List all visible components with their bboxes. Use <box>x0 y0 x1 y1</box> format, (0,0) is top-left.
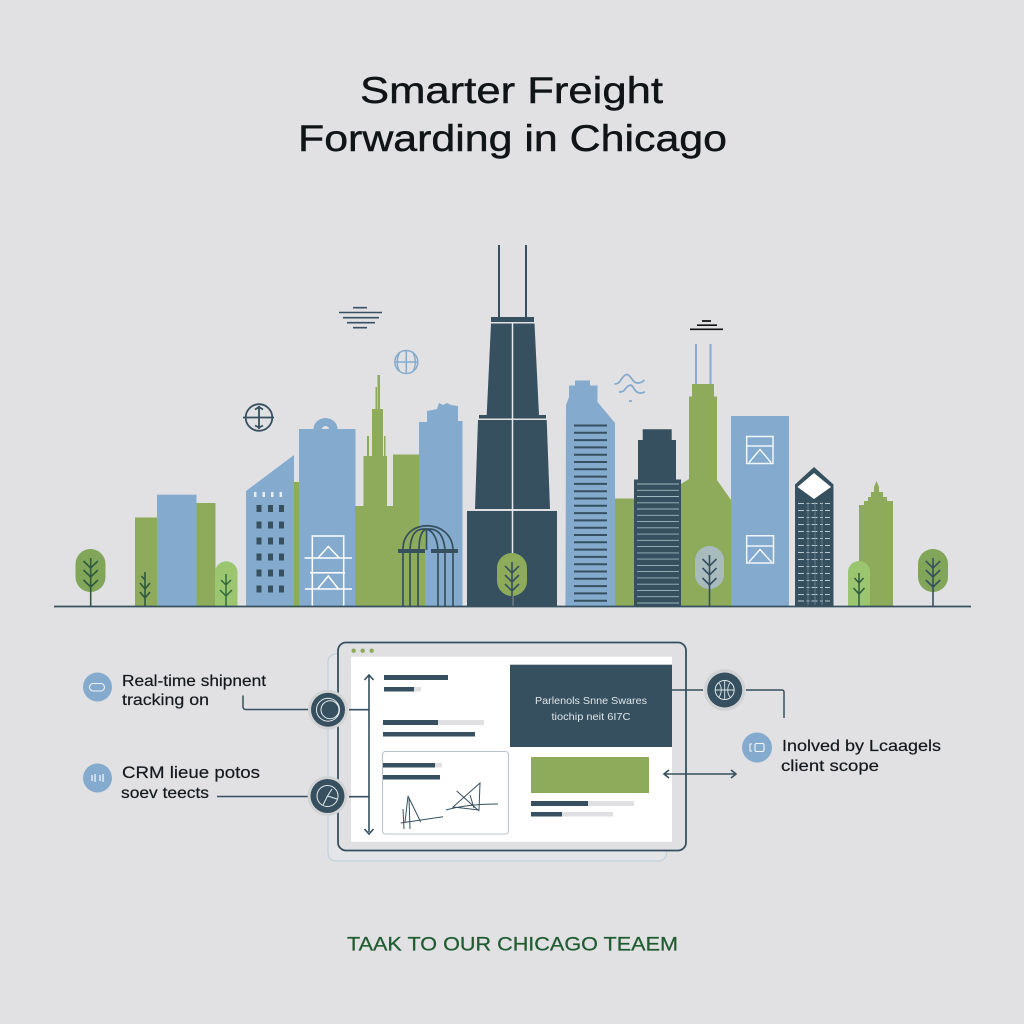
icon: dark circle badge <box>308 690 348 730</box>
icon: blue bars badge <box>83 764 112 792</box>
icon: dark globe badge <box>704 669 746 711</box>
tree: centre green <box>497 553 527 606</box>
dark info panel: Parlenols Snne Swares <box>535 695 647 707</box>
label text: Real-time shipnent <box>122 673 267 690</box>
dome pavilion <box>398 526 458 606</box>
icon: black lines right <box>690 321 723 329</box>
tree: small on green block <box>140 572 150 606</box>
label text <box>121 763 260 802</box>
building: dark diamond-top tower <box>795 467 834 606</box>
icon: blue waves <box>614 375 645 401</box>
tree: far left <box>76 549 106 606</box>
icon: stacked lines left <box>339 308 382 328</box>
label text <box>122 673 267 709</box>
connector line <box>243 696 310 710</box>
label text: CRM lieue potos <box>122 763 260 782</box>
dark info panel <box>510 665 672 747</box>
dashboard mockup <box>328 642 686 861</box>
green panel <box>531 757 649 793</box>
connector line <box>217 796 309 798</box>
title: Forwarding in Chicago <box>298 117 727 159</box>
icon: blue badge <box>742 732 772 762</box>
title <box>298 69 727 159</box>
icon: blue globe <box>395 350 418 374</box>
label text <box>781 738 941 775</box>
skyline illustration <box>54 245 971 606</box>
icon: dark target <box>243 404 274 431</box>
label text: Inolved by Lcaagels <box>782 738 941 755</box>
title: Smarter Freight <box>360 69 664 111</box>
building: small green stepped tower <box>859 481 893 606</box>
building: blue striped tower <box>566 380 635 606</box>
tree: light green small <box>215 561 238 606</box>
tree: far right <box>918 549 948 606</box>
horizontal double arrow <box>664 770 736 778</box>
tree: light green right small <box>848 561 870 606</box>
window content area <box>351 657 672 842</box>
building: blue with arch and scaffold <box>299 418 356 606</box>
connector line <box>672 690 784 718</box>
ground line <box>54 606 971 608</box>
building: left green and blue block <box>135 495 216 606</box>
callout: CRM <box>83 763 348 816</box>
callout: real-time shipment tracking <box>83 672 348 730</box>
label text: soev teects <box>121 785 209 802</box>
building: angled blue with windows <box>246 455 301 606</box>
line sketch chart <box>382 752 508 834</box>
dark info panel: tiochip neit 6I7C <box>552 711 631 723</box>
label text: client scope <box>781 758 879 775</box>
building: green Willis-style tower <box>355 375 425 606</box>
callout: client scope <box>664 669 941 778</box>
progress bars <box>531 801 634 816</box>
building: central dark Hancock tower <box>467 245 557 606</box>
tree: grey-green <box>695 546 724 606</box>
back frame <box>328 654 666 861</box>
window dots <box>352 648 374 653</box>
text bars: top list <box>383 675 484 736</box>
call to action: TAAK TO OUR CHICAGO TEAEM <box>347 934 678 956</box>
icon: blue pill badge <box>83 672 112 702</box>
vertical double arrow <box>349 675 374 834</box>
window frame <box>338 642 686 850</box>
building: blue crown tower <box>419 403 462 606</box>
building: blue with window frames <box>731 416 789 606</box>
label text: tracking on <box>122 692 209 709</box>
icon: dark pie badge <box>308 776 348 816</box>
building: green stepped tower with antennas <box>681 344 731 606</box>
building: dark striped tower <box>634 429 681 606</box>
